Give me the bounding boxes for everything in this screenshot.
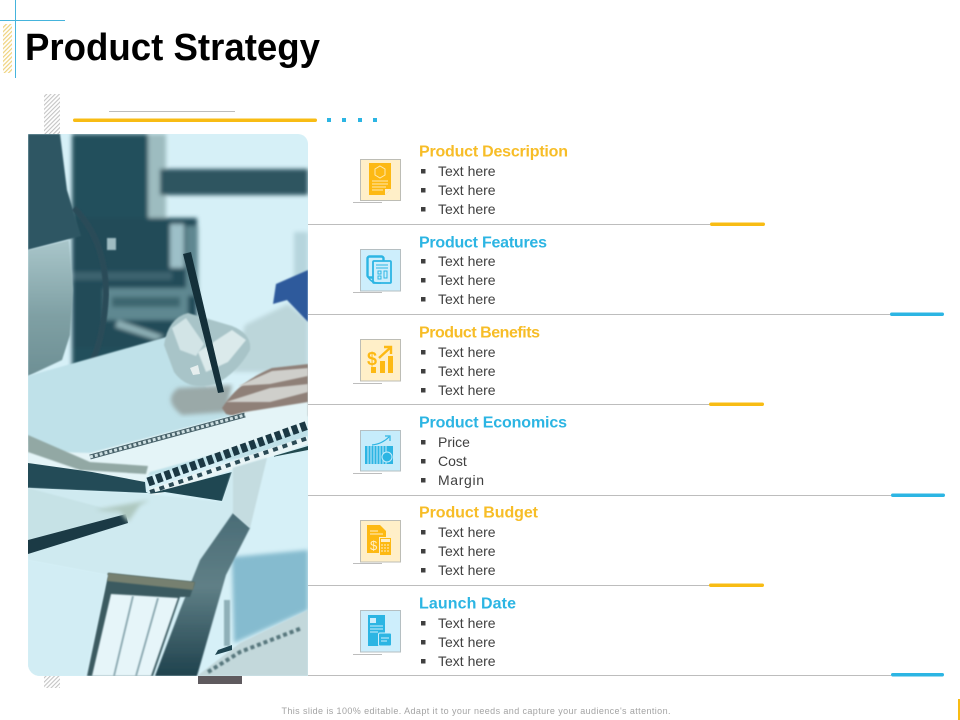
bullet list: Text here — [438, 543, 496, 559]
bullet list: Text here — [438, 201, 496, 217]
bullet list: Text here — [438, 182, 496, 198]
bullet list: Text here — [438, 524, 496, 540]
table — [28, 336, 308, 475]
bullet list: Text here — [438, 344, 496, 360]
lower accent tab and hatch under photo — [44, 676, 242, 688]
icon: document with cube — [353, 160, 400, 203]
bullet list: Text here — [438, 272, 496, 288]
divider with blue accent — [308, 312, 944, 316]
pen — [183, 252, 224, 393]
bullet list: Text here — [438, 653, 496, 669]
footer note: This slide is 100% editable. Adapt it to your needs and capture your audience's attention. — [282, 706, 670, 716]
row 6: Launch Date — [308, 596, 944, 676]
bullet list — [421, 253, 496, 307]
title: Product Strategy — [25, 27, 320, 69]
dark ruler edge — [155, 513, 250, 676]
heading: Launch Date — [419, 596, 516, 612]
blurred background: dark column, bar and glass — [72, 134, 308, 374]
divider with blue accent — [308, 673, 944, 676]
bullet list: Cost — [438, 453, 467, 469]
bullet list: Text here — [438, 562, 496, 578]
keyboard — [87, 573, 195, 676]
bullet list: Text here — [438, 253, 496, 269]
row 2: Product Features — [308, 234, 944, 316]
icon: overlapping pages — [353, 250, 400, 293]
icon: money chart — [353, 430, 400, 474]
divider with yellow accent — [308, 222, 765, 226]
second hand — [222, 363, 308, 416]
bottle cap glint — [107, 238, 116, 250]
divider with yellow accent — [308, 584, 764, 587]
forearm and sleeve — [232, 304, 308, 372]
icon: invoice and calculator: $ — [370, 538, 378, 553]
heading: Product Budget — [419, 504, 539, 522]
heading: Product Features — [419, 234, 547, 252]
corner accent — [958, 699, 960, 720]
top decoration: rule and dots — [44, 94, 377, 134]
divider with blue accent — [308, 494, 945, 497]
icon: receipt and card — [353, 610, 400, 655]
heading: Product Description — [419, 144, 568, 160]
decorative corner lines and hatch — [0, 0, 65, 78]
shirt and arm — [28, 134, 81, 250]
row 5: Product Budget — [308, 504, 764, 587]
divider with yellow accent — [308, 402, 764, 406]
icon: dollar and rising bars — [353, 340, 400, 384]
bullet list — [421, 434, 484, 488]
heading: Product Economics — [419, 414, 567, 432]
row 1: Product Description — [308, 144, 765, 226]
bullet list — [421, 524, 496, 578]
writing hand — [164, 313, 250, 386]
row 4: Product Economics — [308, 414, 945, 497]
icon: invoice and calculator — [353, 520, 400, 564]
row 3: Product Benefits — [308, 324, 764, 406]
bullet list: Text here — [438, 163, 496, 179]
bullet list — [421, 163, 496, 217]
desk surface and papers — [28, 472, 232, 501]
bullet list: Text here — [438, 291, 496, 307]
heading: Product Benefits — [419, 324, 540, 342]
bullet list: Margin — [438, 472, 484, 488]
icon: dollar and rising bars: $ — [367, 349, 377, 369]
photo: hands writing in a notebook — [28, 134, 308, 676]
notebook pages and spirals — [28, 401, 308, 482]
bottom right binder — [197, 610, 308, 676]
bullet list: Text here — [438, 634, 496, 650]
bullet list — [421, 344, 496, 398]
bullet list: Text here — [438, 363, 496, 379]
bullet list: Price — [438, 434, 470, 450]
bullet list: Text here — [438, 382, 496, 398]
bullet list: Text here — [438, 615, 496, 631]
bullet list — [421, 615, 496, 669]
